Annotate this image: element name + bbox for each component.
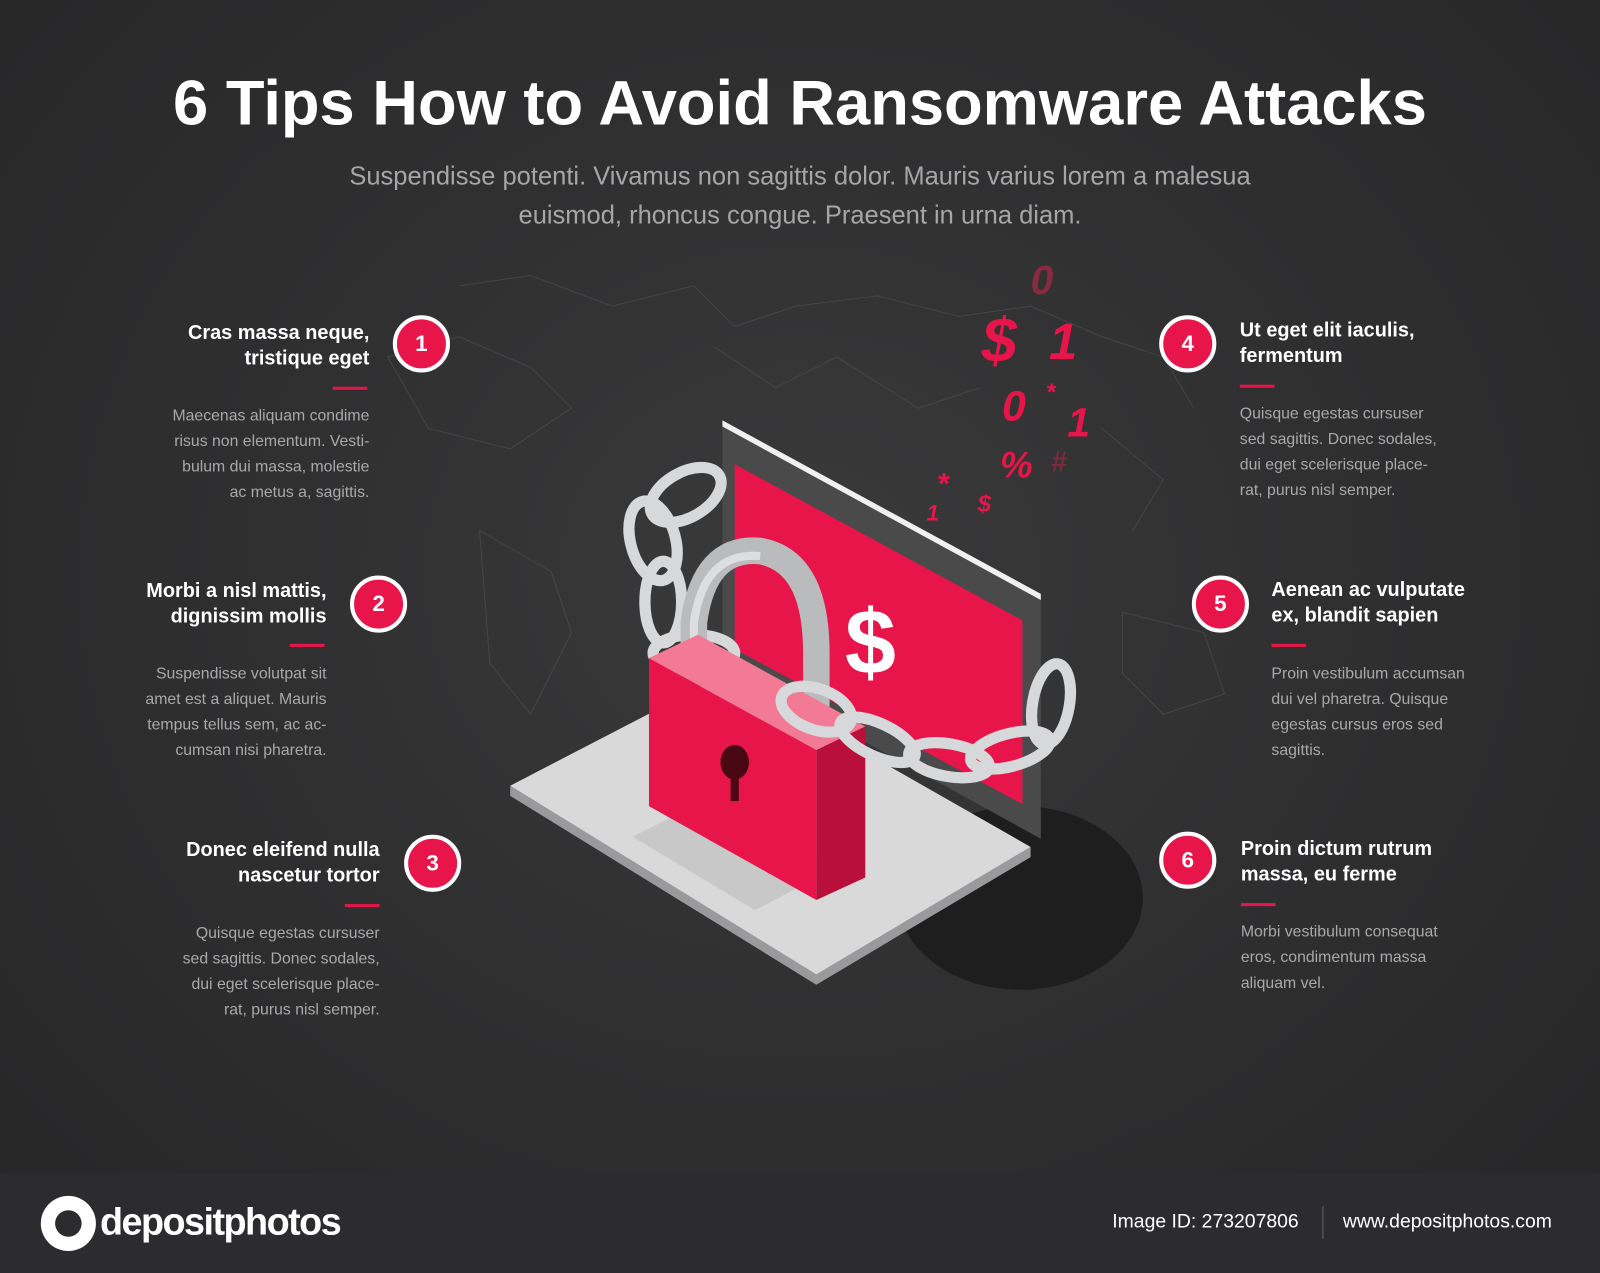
icon: number 1 <box>393 315 450 372</box>
floating symbols: # <box>1051 446 1067 478</box>
left chain <box>621 456 735 671</box>
icon: number 2: 2 <box>372 591 385 616</box>
footer logo <box>40 1196 340 1251</box>
tip 3: dui eget scelerisque place- <box>191 976 380 993</box>
floating symbols: $ <box>981 306 1018 376</box>
title: 6 Tips How to Avoid Ransomware Attacks <box>173 68 1427 139</box>
tip 2: tempus tellus sem, ac ac- <box>147 716 327 734</box>
tip 6: Morbi vestibulum consequat <box>1241 923 1438 941</box>
laptop screen <box>722 420 1041 839</box>
icon: number 5: 5 <box>1214 591 1227 616</box>
floating symbols: 1 <box>927 500 939 525</box>
icon: number 5 <box>1192 576 1249 633</box>
floating symbols: 0 <box>1002 382 1026 430</box>
tip 5: egestas cursus eros sed <box>1271 716 1443 734</box>
icon: number 3 <box>404 835 461 892</box>
tip 6: eros, condimentum massa <box>1241 949 1426 966</box>
subtitle: euismod, rhoncus congue. Praesent in urna diam. <box>519 201 1081 230</box>
tip 5: Aenean ac vulputate <box>1271 579 1465 601</box>
tip 3 <box>183 834 462 1018</box>
icon: number 4: 4 <box>1182 331 1194 356</box>
icon: number 4 <box>1159 315 1216 372</box>
tip 5: ex, blandit sapien <box>1271 604 1438 627</box>
floating symbols: 1 <box>1049 313 1077 370</box>
tip 2: amet est a aliquet. Mauris <box>145 691 327 708</box>
tip 6: Proin dictum rutrum <box>1241 838 1432 860</box>
subtitle <box>349 162 1251 230</box>
tip 3: nascetur tortor <box>238 864 380 887</box>
icon: number 6 <box>1159 832 1216 889</box>
footer image id: Image ID: 273207806 <box>1112 1211 1299 1233</box>
tip 5: sagittis. <box>1271 742 1325 759</box>
icon: number 6: 6 <box>1182 847 1194 872</box>
shadow <box>898 806 1143 990</box>
tip 6: aliquam vel. <box>1241 974 1325 992</box>
tip 2 <box>145 576 408 759</box>
tip 5: Proin vestibulum accumsan <box>1271 665 1465 683</box>
tip 1: Maecenas aliquam condime <box>172 407 369 424</box>
tip 3: sed sagittis. Donec sodales, <box>183 950 380 967</box>
tip 6 <box>1159 832 1438 992</box>
footer bar <box>0 1173 1600 1273</box>
tip 4: Quisque egestas cursuser <box>1240 405 1424 422</box>
footer url: www.depositphotos.com <box>1343 1211 1552 1233</box>
tip 3: rat, purus nisl semper. <box>224 1001 380 1018</box>
tip 2: dignissim mollis <box>171 605 327 628</box>
floating symbols <box>927 257 1090 525</box>
footer logo: depositphotos <box>100 1201 340 1243</box>
tip 4: rat, purus nisl semper. <box>1240 482 1395 499</box>
floating symbols: % <box>1000 445 1033 486</box>
laptop base <box>510 673 1031 985</box>
subtitle: Suspendisse potenti. Vivamus non sagittis dolor. Mauris varius lorem a malesua <box>349 162 1251 191</box>
tip 2: Suspendisse volutpat sit <box>156 665 327 683</box>
floating symbols: * <box>1046 379 1057 406</box>
floating symbols: * <box>937 467 951 501</box>
laptop screen: $ <box>845 591 896 693</box>
tip 1: ac metus a, sagittis. <box>230 484 369 501</box>
tip 6: massa, eu ferme <box>1241 863 1397 886</box>
tip 2: cumsan nisi pharetra. <box>175 742 327 759</box>
icon: number 3: 3 <box>426 850 439 876</box>
tip 5 <box>1192 576 1465 759</box>
tip 4 <box>1159 315 1437 499</box>
tip 3: Quisque egestas cursuser <box>196 924 380 942</box>
tip 5: dui vel pharetra. Quisque <box>1271 691 1448 708</box>
tip 4: sed sagittis. Donec sodales, <box>1240 431 1437 448</box>
padlock <box>649 551 865 900</box>
icon: number 1: 1 <box>415 331 428 356</box>
tip 4: Ut eget elit iaculis, <box>1240 319 1415 342</box>
tip 1: bulum dui massa, molestie <box>182 458 369 476</box>
floating symbols: 1 <box>1067 400 1090 446</box>
floating symbols: 0 <box>1031 257 1054 303</box>
tip 1: risus non elementum. Vesti- <box>174 433 369 450</box>
tip 1: Cras massa neque, <box>188 321 369 344</box>
icon: number 2 <box>350 576 407 633</box>
tip 4: dui eget scelerisque place- <box>1240 456 1428 473</box>
right chain <box>775 661 1076 783</box>
tip 1 <box>172 315 450 501</box>
tip 3: Donec eleifend nulla <box>186 839 380 861</box>
tip 4: fermentum <box>1240 345 1343 367</box>
tip 1: tristique eget <box>244 347 369 369</box>
floating symbols: $ <box>977 491 992 518</box>
tip 2: Morbi a nisl mattis, <box>146 580 327 602</box>
